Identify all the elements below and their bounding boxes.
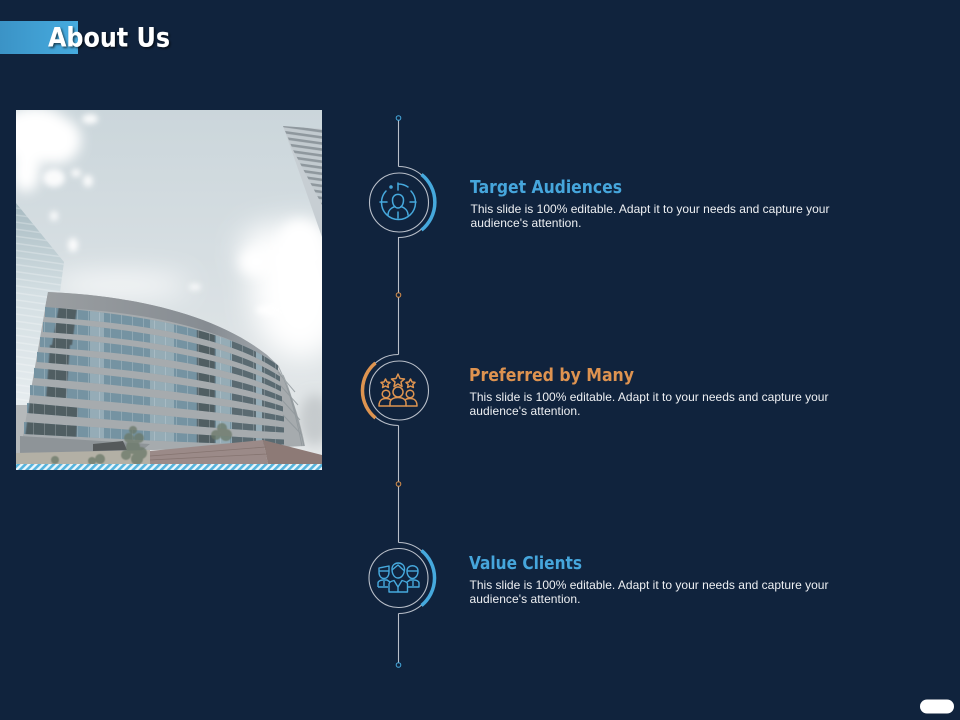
dot: bottom [396,663,401,667]
panel: building photograph [16,110,322,470]
node: Preferred by Many [362,354,428,426]
title: About Us with blue bar: About Us [48,22,170,54]
glass floors [24,307,284,444]
lower plinth, wall and trees [20,436,150,453]
timeline connector [398,120,400,662]
icon: target person [380,183,416,220]
dot: lower orange [396,482,401,486]
icon: three people with stars [379,374,417,406]
text: Target Audiences: Target Audiences [470,178,622,198]
icon: business team [378,563,419,592]
text: Value Clients [469,554,828,606]
title: About Us with blue bar [0,21,170,54]
hatched strip [16,464,322,470]
text: Value Clients: audience's attention. [470,592,580,606]
text: Target Audiences [470,178,830,230]
text: Target Audiences: This slide is 100% editable. Adapt it to your needs and capture your [470,202,830,216]
text: Target Audiences: audience's attention. [470,216,582,230]
node: Target Audiences [370,166,435,238]
white pill [920,700,954,714]
text: Preferred by Many: audience's attention. [470,404,580,418]
text: Preferred by Many: This slide is 100% editable. Adapt it to your needs and capture your [470,390,828,404]
text: Preferred by Many: Preferred by Many [469,366,635,386]
text: Preferred by Many [469,366,828,418]
text: Value Clients: Value Clients [469,554,582,574]
right light edge of the facade [278,366,304,446]
right tower [286,133,322,237]
dot: upper orange [396,293,401,297]
left tower [16,203,64,296]
main building facade [20,292,305,453]
text: Value Clients: This slide is 100% editable. Adapt it to your needs and capture your [470,578,828,592]
node: Value Clients [369,542,435,614]
dot: top [396,116,401,120]
